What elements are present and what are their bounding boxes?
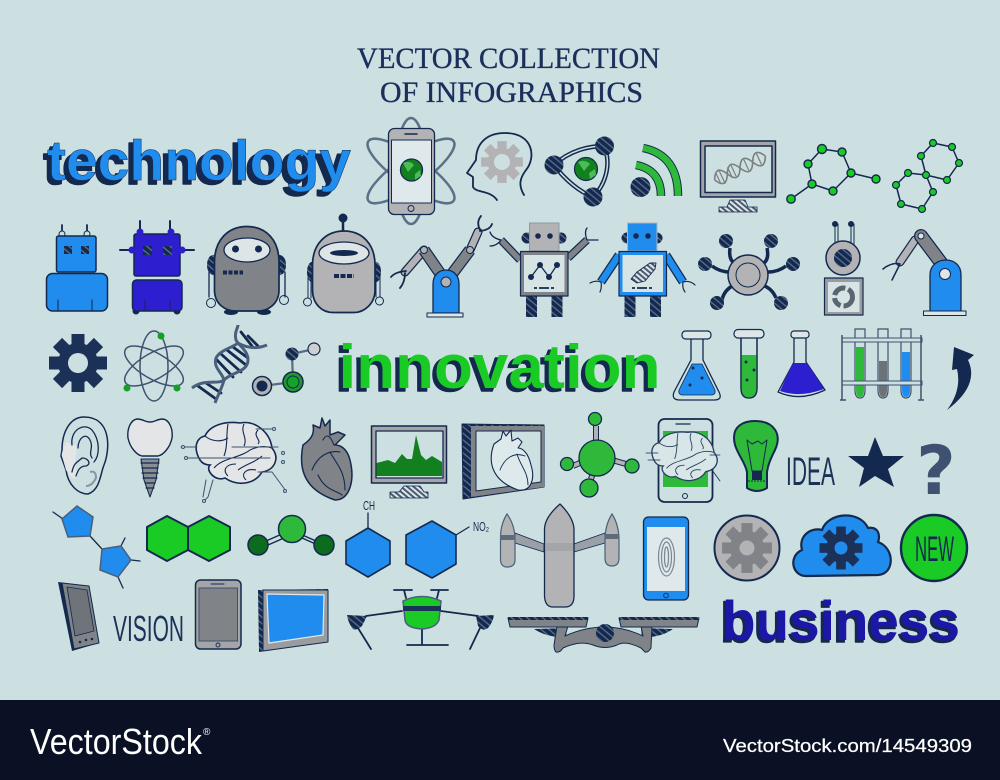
icon: globe network xyxy=(544,136,614,206)
icon: single robot arm xyxy=(883,233,966,316)
icon: dark grey round robot xyxy=(206,226,288,315)
icon: atom xyxy=(119,331,189,401)
icon: tilted frame with heart xyxy=(462,424,544,499)
footer xyxy=(0,700,1000,780)
icon: indigo robot xyxy=(120,221,194,314)
icon: light bulb xyxy=(734,421,778,491)
icon: ear xyxy=(61,417,108,494)
icon: three-ball chain xyxy=(248,516,334,555)
icon: test tube rack xyxy=(840,329,924,400)
icon: three-atom molecule xyxy=(252,343,320,396)
icon: monitor with DNA xyxy=(700,141,776,212)
word: innovation: innovation xyxy=(338,333,660,402)
icon: test tube with green liquid xyxy=(734,330,764,398)
text: VISION: VISION xyxy=(113,608,184,649)
icon: blue tablet xyxy=(258,589,328,652)
word: business: business xyxy=(720,591,958,654)
word: business: business xyxy=(722,589,960,652)
text: IDEA: IDEA xyxy=(786,450,835,494)
icon: flask with indigo liquid xyxy=(778,331,825,397)
title: VECTOR COLLECTION xyxy=(357,42,660,75)
icon: blue hexagon with CH xyxy=(346,498,390,577)
title: OF INFOGRAPHICS xyxy=(380,76,643,109)
icon: wifi signal xyxy=(630,148,678,197)
icon: robot with line chart xyxy=(490,223,598,317)
icon: blue hexagon with NO2 xyxy=(406,519,489,578)
icon: blue hexagon with NO2: NO₂ xyxy=(473,519,489,534)
icon: molecule chain xyxy=(787,144,880,203)
icon: blue hexagon with CH: CH xyxy=(363,498,375,513)
icon: tilted tablet xyxy=(58,582,99,651)
icon: green molecule xyxy=(560,412,639,497)
icon: hub with six nodes xyxy=(698,234,800,310)
icon: navy gear xyxy=(49,334,107,392)
icon: circuit brain xyxy=(181,423,286,502)
icon: gear in circle xyxy=(714,516,780,580)
icon: monitor with green chart xyxy=(372,426,446,498)
footer: ® xyxy=(203,727,211,738)
icon: pentagon molecule xyxy=(53,506,140,588)
icon: blue robot xyxy=(46,225,108,311)
icon: robot arm with two claws xyxy=(391,216,492,317)
icon: phone with brain xyxy=(646,419,720,502)
icon: DNA helix xyxy=(192,325,267,403)
footer: VectorStock.com/14549309 xyxy=(723,735,972,756)
title xyxy=(357,42,660,109)
icon: anatomical heart xyxy=(302,418,352,500)
icon: tooth implant xyxy=(128,419,172,497)
icon: phone with fingerprint xyxy=(644,517,688,600)
icon: NEW badge xyxy=(901,515,967,581)
icon: green double hexagon xyxy=(147,516,230,561)
icon: top-view drone xyxy=(500,504,619,607)
footer: VectorStock xyxy=(30,721,203,762)
icon: curved arrow xyxy=(947,347,974,410)
icon: star xyxy=(848,437,904,487)
word: technology: technology xyxy=(43,133,346,197)
icon: question mark: ? xyxy=(916,432,956,511)
icon: light grey round robot xyxy=(304,214,384,312)
word: technology: technology xyxy=(47,129,351,193)
icon: robot with rocket xyxy=(590,223,695,317)
icon: head with gear xyxy=(467,133,531,200)
icon: phone with atom orbits xyxy=(360,118,462,224)
icon: NEW badge: NEW xyxy=(915,530,954,569)
icon: grey wing drone xyxy=(508,617,699,652)
icon: cloud with gear xyxy=(793,515,891,576)
icon: antenna device with pie chart xyxy=(824,221,863,315)
icon: grey phone xyxy=(196,580,241,649)
icon: double-ring molecule xyxy=(892,140,962,212)
icon: green drone xyxy=(347,590,494,649)
icon: flask with blue liquid xyxy=(673,331,720,400)
word: innovation: innovation xyxy=(335,336,657,405)
